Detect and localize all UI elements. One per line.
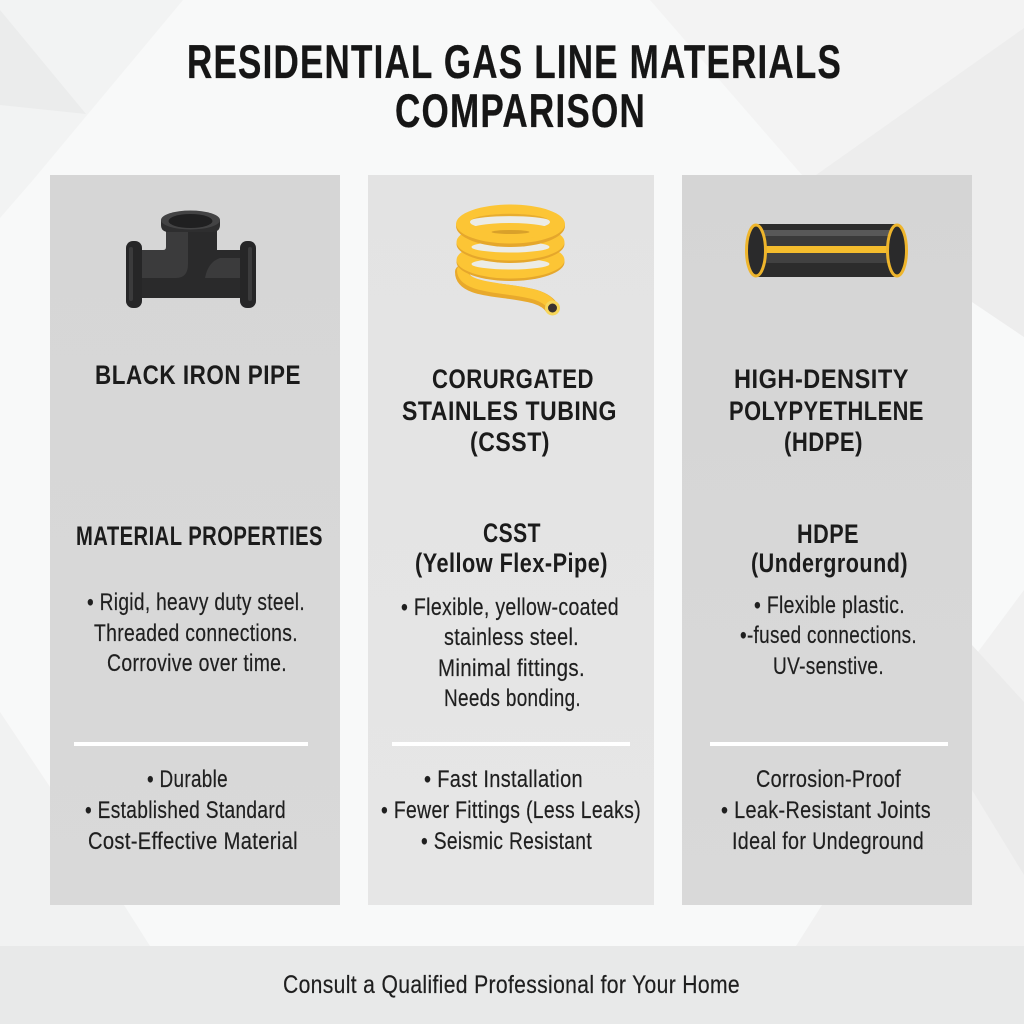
icon: black iron tee fitting [126, 210, 256, 308]
text: CSST benefits: • Seismic Resistant [421, 828, 592, 855]
title: COMPARISON [395, 84, 646, 137]
text: HDPE benefits: Ideal for Undeground [732, 828, 924, 855]
subheading: HDPE underground [751, 519, 908, 578]
text: CSST properties: Needs bonding. [444, 685, 581, 712]
text: HDPE benefits: • Leak-Resistant Joints [721, 797, 931, 824]
text: HDPE properties: •-fused connections. [740, 622, 917, 649]
text: HDPE benefits [721, 766, 931, 855]
text: CSST benefits: • Fast Installation [424, 766, 583, 793]
text: HDPE properties [740, 592, 917, 680]
icon: yellow coiled tubing [456, 204, 565, 314]
subheading: CSST yellow flex-pipe: CSST [483, 518, 541, 548]
text: iron benefits [85, 766, 298, 855]
panel: black iron pipe [50, 175, 340, 905]
text: CSST properties: stainless steel. [444, 624, 579, 651]
text: iron properties: Corrovive over time. [107, 650, 287, 677]
text: HDPE benefits: Corrosion-Proof [756, 766, 901, 793]
icon: HDPE pipe with yellow stripe [746, 224, 906, 277]
text: iron properties: • Rigid, heavy duty steel. [87, 589, 305, 616]
heading: black iron pipe: BLACK IRON PIPE [95, 360, 301, 390]
subheading: HDPE underground: (Underground) [751, 548, 908, 578]
heading: HDPE: HIGH-DENSITY [734, 364, 909, 394]
panel: HDPE [682, 175, 972, 905]
text: iron properties [87, 589, 305, 677]
text: iron benefits: • Durable [147, 766, 228, 793]
heading: CSST: (CSST) [470, 427, 550, 457]
footer band [0, 946, 1024, 1024]
text: CSST benefits: • Fewer Fittings (Less Leaks) [381, 797, 641, 824]
text: CSST properties: Minimal fittings. [438, 655, 585, 682]
subheading: CSST yellow flex-pipe [415, 518, 608, 578]
subheading: HDPE underground: HDPE [797, 519, 859, 549]
footer band: Consult a Qualified Professional for Your Home [283, 971, 740, 999]
subheading: material properties: MATERIAL PROPERTIES [76, 521, 323, 551]
text: CSST benefits [381, 766, 641, 855]
text: HDPE properties: • Flexible plastic. [754, 592, 905, 619]
heading: CSST [402, 364, 617, 457]
text: iron benefits: Cost-Effective Material [88, 828, 298, 855]
subheading: CSST yellow flex-pipe: (Yellow Flex-Pipe) [415, 548, 608, 578]
text: iron properties: Threaded connections. [94, 620, 298, 647]
heading: CSST: STAINLES TUBING [402, 396, 617, 426]
title [187, 35, 842, 137]
heading: HDPE [729, 364, 924, 457]
text: CSST properties [401, 594, 619, 712]
panel: CSST [368, 175, 654, 905]
heading: HDPE: (HDPE) [784, 427, 863, 457]
heading: HDPE: POLYPYETHLENE [729, 396, 924, 426]
text: HDPE properties: UV-senstive. [773, 653, 884, 680]
heading: CSST: CORURGATED [432, 364, 594, 394]
text: iron benefits: • Established Standard [85, 797, 286, 824]
text: CSST properties: • Flexible, yellow-coated [401, 594, 619, 621]
